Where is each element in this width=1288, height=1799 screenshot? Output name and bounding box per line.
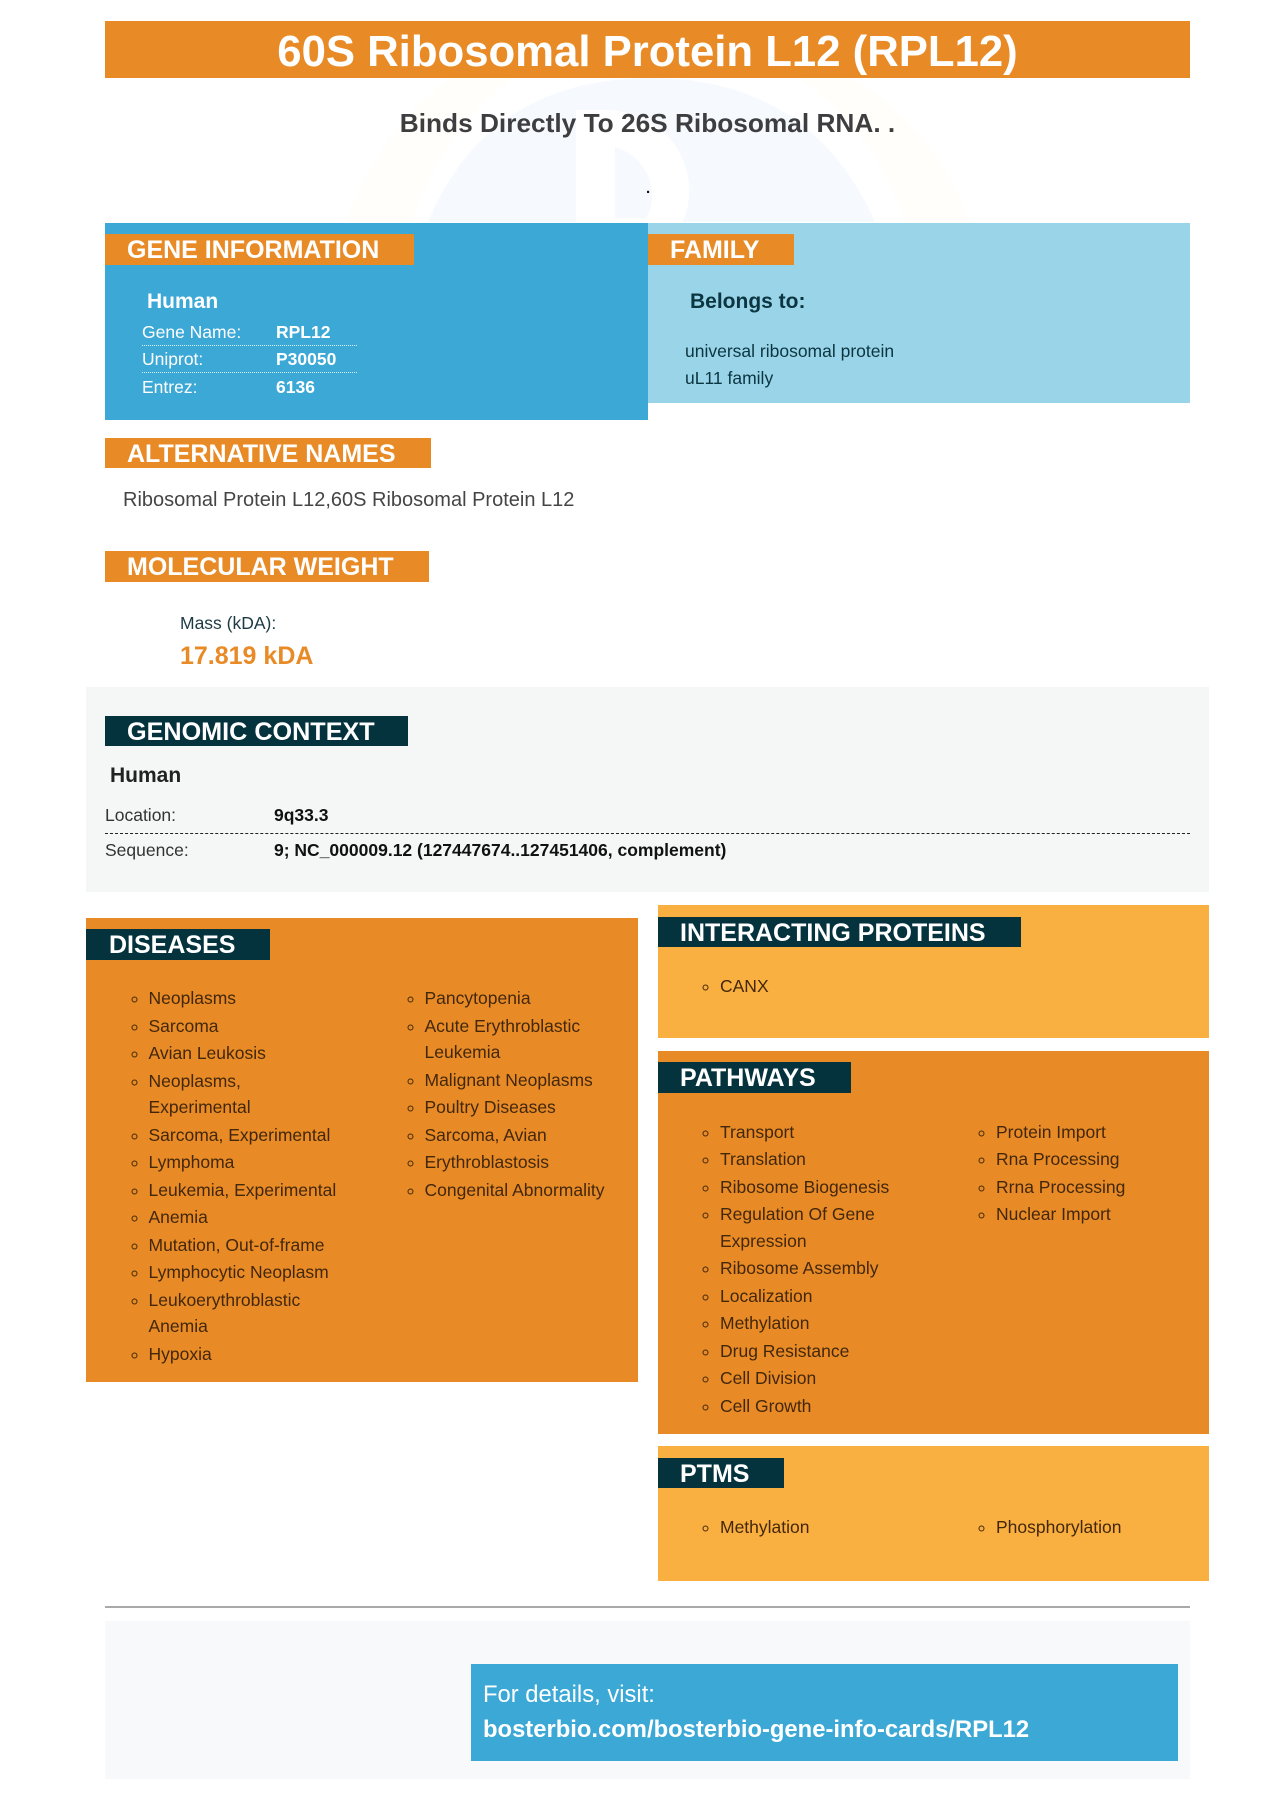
heading: ptms: PTMS xyxy=(680,1460,749,1488)
disease list column 2: Congenital Abnormality xyxy=(424,1180,604,1200)
disease list column 1: Avian Leukosis xyxy=(148,1043,266,1063)
location row xyxy=(105,805,328,825)
gene identifiers table: Gene Name: xyxy=(142,322,241,342)
pathways list column 2: Nuclear Import xyxy=(996,1204,1111,1224)
panel: footer xyxy=(105,1621,1190,1779)
disease list column 2: Acute Erythroblastic xyxy=(424,1016,580,1036)
alternative names text: Ribosomal Protein L12,60S Ribosomal Protein L12 xyxy=(123,489,574,511)
pathways list column 2: Protein Import xyxy=(996,1122,1106,1142)
callout: details link xyxy=(471,1664,1178,1761)
disease list column 1: Leukemia, Experimental xyxy=(148,1180,336,1200)
pathways list column 1: Transport xyxy=(720,1122,794,1142)
mass label: Mass (kDA): xyxy=(180,613,276,633)
species heading: Human xyxy=(110,764,181,787)
subtitle: Binds Directly To 26S Ribosomal RNA. . xyxy=(400,108,895,138)
panel: pathways xyxy=(658,1051,1209,1434)
disease list column 2 xyxy=(408,988,604,1200)
heading: molecular weight: MOLECULAR WEIGHT xyxy=(127,553,394,581)
gene identifiers table: 6136 xyxy=(276,377,315,397)
title banner: 60S Ribosomal Protein L12 (RPL12) xyxy=(277,27,1018,76)
panel: interacting proteins xyxy=(658,905,1209,1038)
gene identifiers table xyxy=(142,322,357,397)
heading: ptms xyxy=(658,1458,784,1488)
gene identifiers table: RPL12 xyxy=(276,322,330,342)
pathways list column 2: Rrna Processing xyxy=(996,1176,1125,1196)
disease list column 2: Poultry Diseases xyxy=(424,1097,556,1117)
panel: ptms xyxy=(658,1446,1209,1581)
gene identifiers table: P30050 xyxy=(276,349,336,369)
disease list column 1 xyxy=(132,988,336,1364)
pathways list column 1: Methylation xyxy=(720,1313,810,1333)
disease list column 1: Anemia xyxy=(148,1316,208,1336)
heading: diseases xyxy=(86,929,270,960)
heading: pathways: PATHWAYS xyxy=(680,1064,816,1092)
family description: universal ribosomal protein xyxy=(685,341,894,361)
heading: genomic context: GENOMIC CONTEXT xyxy=(127,718,375,746)
title banner xyxy=(105,21,1190,78)
disease list column 1: Neoplasms xyxy=(148,988,236,1008)
sequence row: 9; NC_000009.12 (127447674..127451406, complement) xyxy=(274,840,726,860)
callout: details link: bosterbio.com/bosterbio-gene-info-cards/RPL12 xyxy=(483,1716,1029,1743)
disease list column 1: Leukoerythroblastic xyxy=(148,1290,300,1310)
pathways list column 2: Rna Processing xyxy=(996,1149,1120,1169)
pathways list column 2 xyxy=(978,1122,1125,1224)
location row: Location: xyxy=(105,805,176,825)
species heading: Human xyxy=(147,290,218,313)
heading: pathways xyxy=(658,1062,851,1093)
belongs to heading: Belongs to: xyxy=(690,290,806,313)
sequence row: Sequence: xyxy=(105,840,189,860)
disease list column 1: Lymphocytic Neoplasm xyxy=(148,1262,329,1282)
gene identifiers table: Uniprot: xyxy=(142,349,203,369)
panel: diseases xyxy=(86,918,638,1382)
panel: gene information xyxy=(105,223,648,420)
watermark logo xyxy=(428,78,874,222)
heading: family xyxy=(648,234,794,265)
family description xyxy=(685,341,894,388)
heading: alternative names: ALTERNATIVE NAMES xyxy=(127,440,396,468)
pathways list column 1: Localization xyxy=(720,1286,812,1306)
disease list column 2: Pancytopenia xyxy=(424,988,531,1008)
disease list column 1: Anemia xyxy=(148,1207,208,1227)
disease list column 2: Leukemia xyxy=(424,1042,500,1062)
panel: family xyxy=(648,223,1190,403)
disease list column 1: Mutation, Out-of-frame xyxy=(148,1234,325,1254)
panel: genomic context xyxy=(86,687,1209,892)
disease list column 2: Malignant Neoplasms xyxy=(424,1070,593,1090)
pathways list column 1: Translation xyxy=(720,1149,806,1169)
disease list column 1: Experimental xyxy=(148,1097,251,1117)
pathways list column 1: Expression xyxy=(720,1230,807,1250)
family description: uL11 family xyxy=(685,368,773,388)
disease list column 1: Hypoxia xyxy=(148,1344,212,1364)
heading: family: FAMILY xyxy=(670,236,759,264)
pathways list column 1: Ribosome Assembly xyxy=(720,1258,879,1278)
mass value: 17.819 kDA xyxy=(180,642,313,670)
ptms list column 1: Methylation xyxy=(720,1517,810,1537)
disease list column 1: Neoplasms, xyxy=(148,1070,241,1090)
disease list column 2: Sarcoma, Avian xyxy=(424,1124,547,1144)
pathways list column 1: Cell Division xyxy=(720,1368,816,1388)
disease list column 1: Sarcoma, Experimental xyxy=(148,1124,330,1144)
ptms list column 2: Phosphorylation xyxy=(996,1517,1122,1537)
pathways list column 1: Ribosome Biogenesis xyxy=(720,1176,889,1196)
gene identifiers table: Entrez: xyxy=(142,377,197,397)
pathways list column 1: Regulation Of Gene xyxy=(720,1204,875,1224)
callout: details link: For details, visit: xyxy=(483,1681,655,1708)
disease list column 1: Sarcoma xyxy=(148,1016,219,1036)
pathways list column 1: Drug Resistance xyxy=(720,1340,849,1360)
disease list column 1: Lymphoma xyxy=(148,1152,234,1172)
location row: 9q33.3 xyxy=(274,805,328,825)
heading: gene information: GENE INFORMATION xyxy=(127,236,379,264)
disease list column 2: Erythroblastosis xyxy=(424,1152,549,1172)
interacting proteins list: CANX xyxy=(720,976,769,996)
small dot text: . xyxy=(646,180,650,197)
pathways list column 1 xyxy=(702,1122,889,1416)
heading: interacting proteins: INTERACTING PROTEINS xyxy=(680,919,986,947)
pathways list column 1: Cell Growth xyxy=(720,1396,811,1416)
heading: diseases: DISEASES xyxy=(109,931,235,959)
